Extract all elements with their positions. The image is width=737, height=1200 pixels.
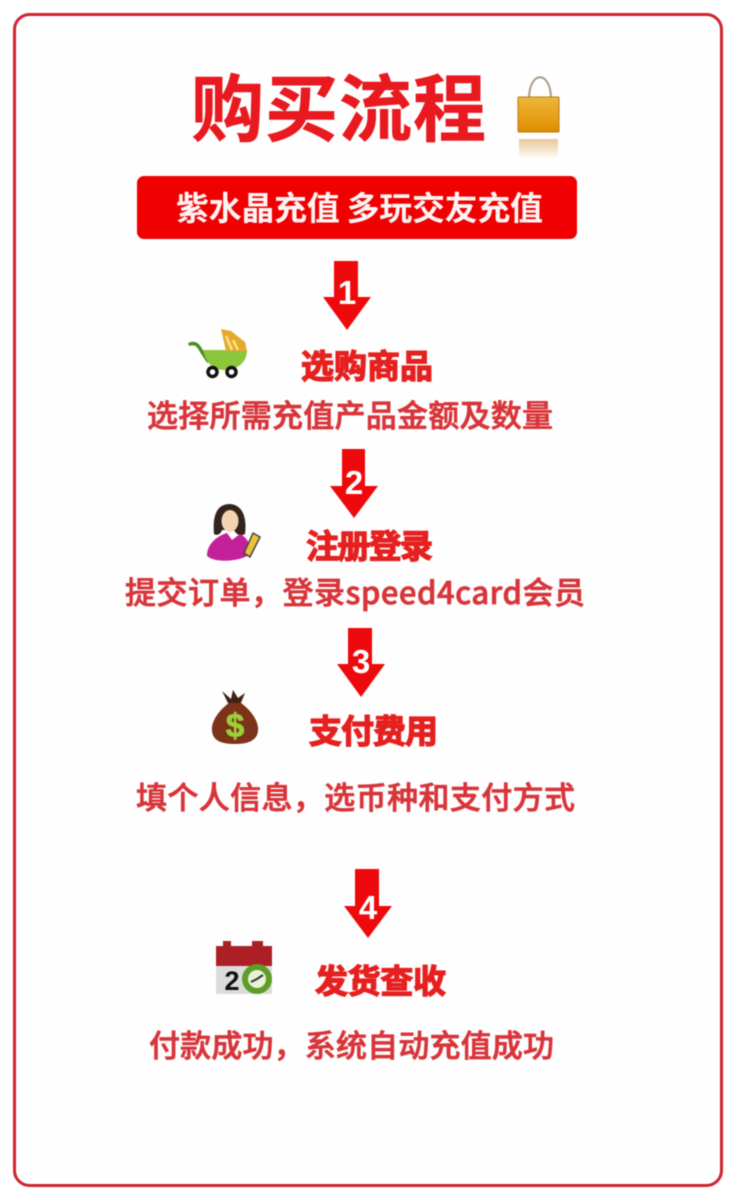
arrow: step 3: 3 [352,643,370,680]
icon: calendar with clock [216,941,272,996]
icon: money bag: $ [226,707,244,744]
text: step 4 description: 付款成功，系统自动充值成功 [149,1021,554,1066]
heading: step 3: 支付费用 [309,705,438,753]
text: step 2 description: 提交订单，登录speed4card会员 [125,568,585,613]
icon: woman with pencil [207,504,260,561]
text: step 1 description: 选择所需充值产品金额及数量 [147,391,553,436]
heading: step 4: 发货查收 [315,955,446,1003]
arrow: step 4 [344,869,392,938]
arrow: step 1: 1 [338,274,356,311]
arrow: step 2 [330,449,378,518]
banner: product name: 紫水晶充值 多玩交友充值 [176,182,543,230]
heading: step 1: 选购商品 [301,340,433,388]
heading: step 2: 注册登录 [306,520,433,568]
icon: money bag [212,690,258,744]
banner: product name [137,176,577,239]
arrow: step 2: 2 [345,464,363,501]
icon: calendar with clock: 2 [224,966,240,996]
icon: green shopping cart [190,329,247,376]
text: step 3 description: 填个人信息，选币种和支付方式 [136,773,575,818]
icon: shopping bag [518,77,559,157]
arrow: step 3 [337,628,385,697]
title: 购买流程 [191,51,486,157]
arrow: step 4: 4 [359,889,378,926]
arrow: step 1 [323,261,371,330]
